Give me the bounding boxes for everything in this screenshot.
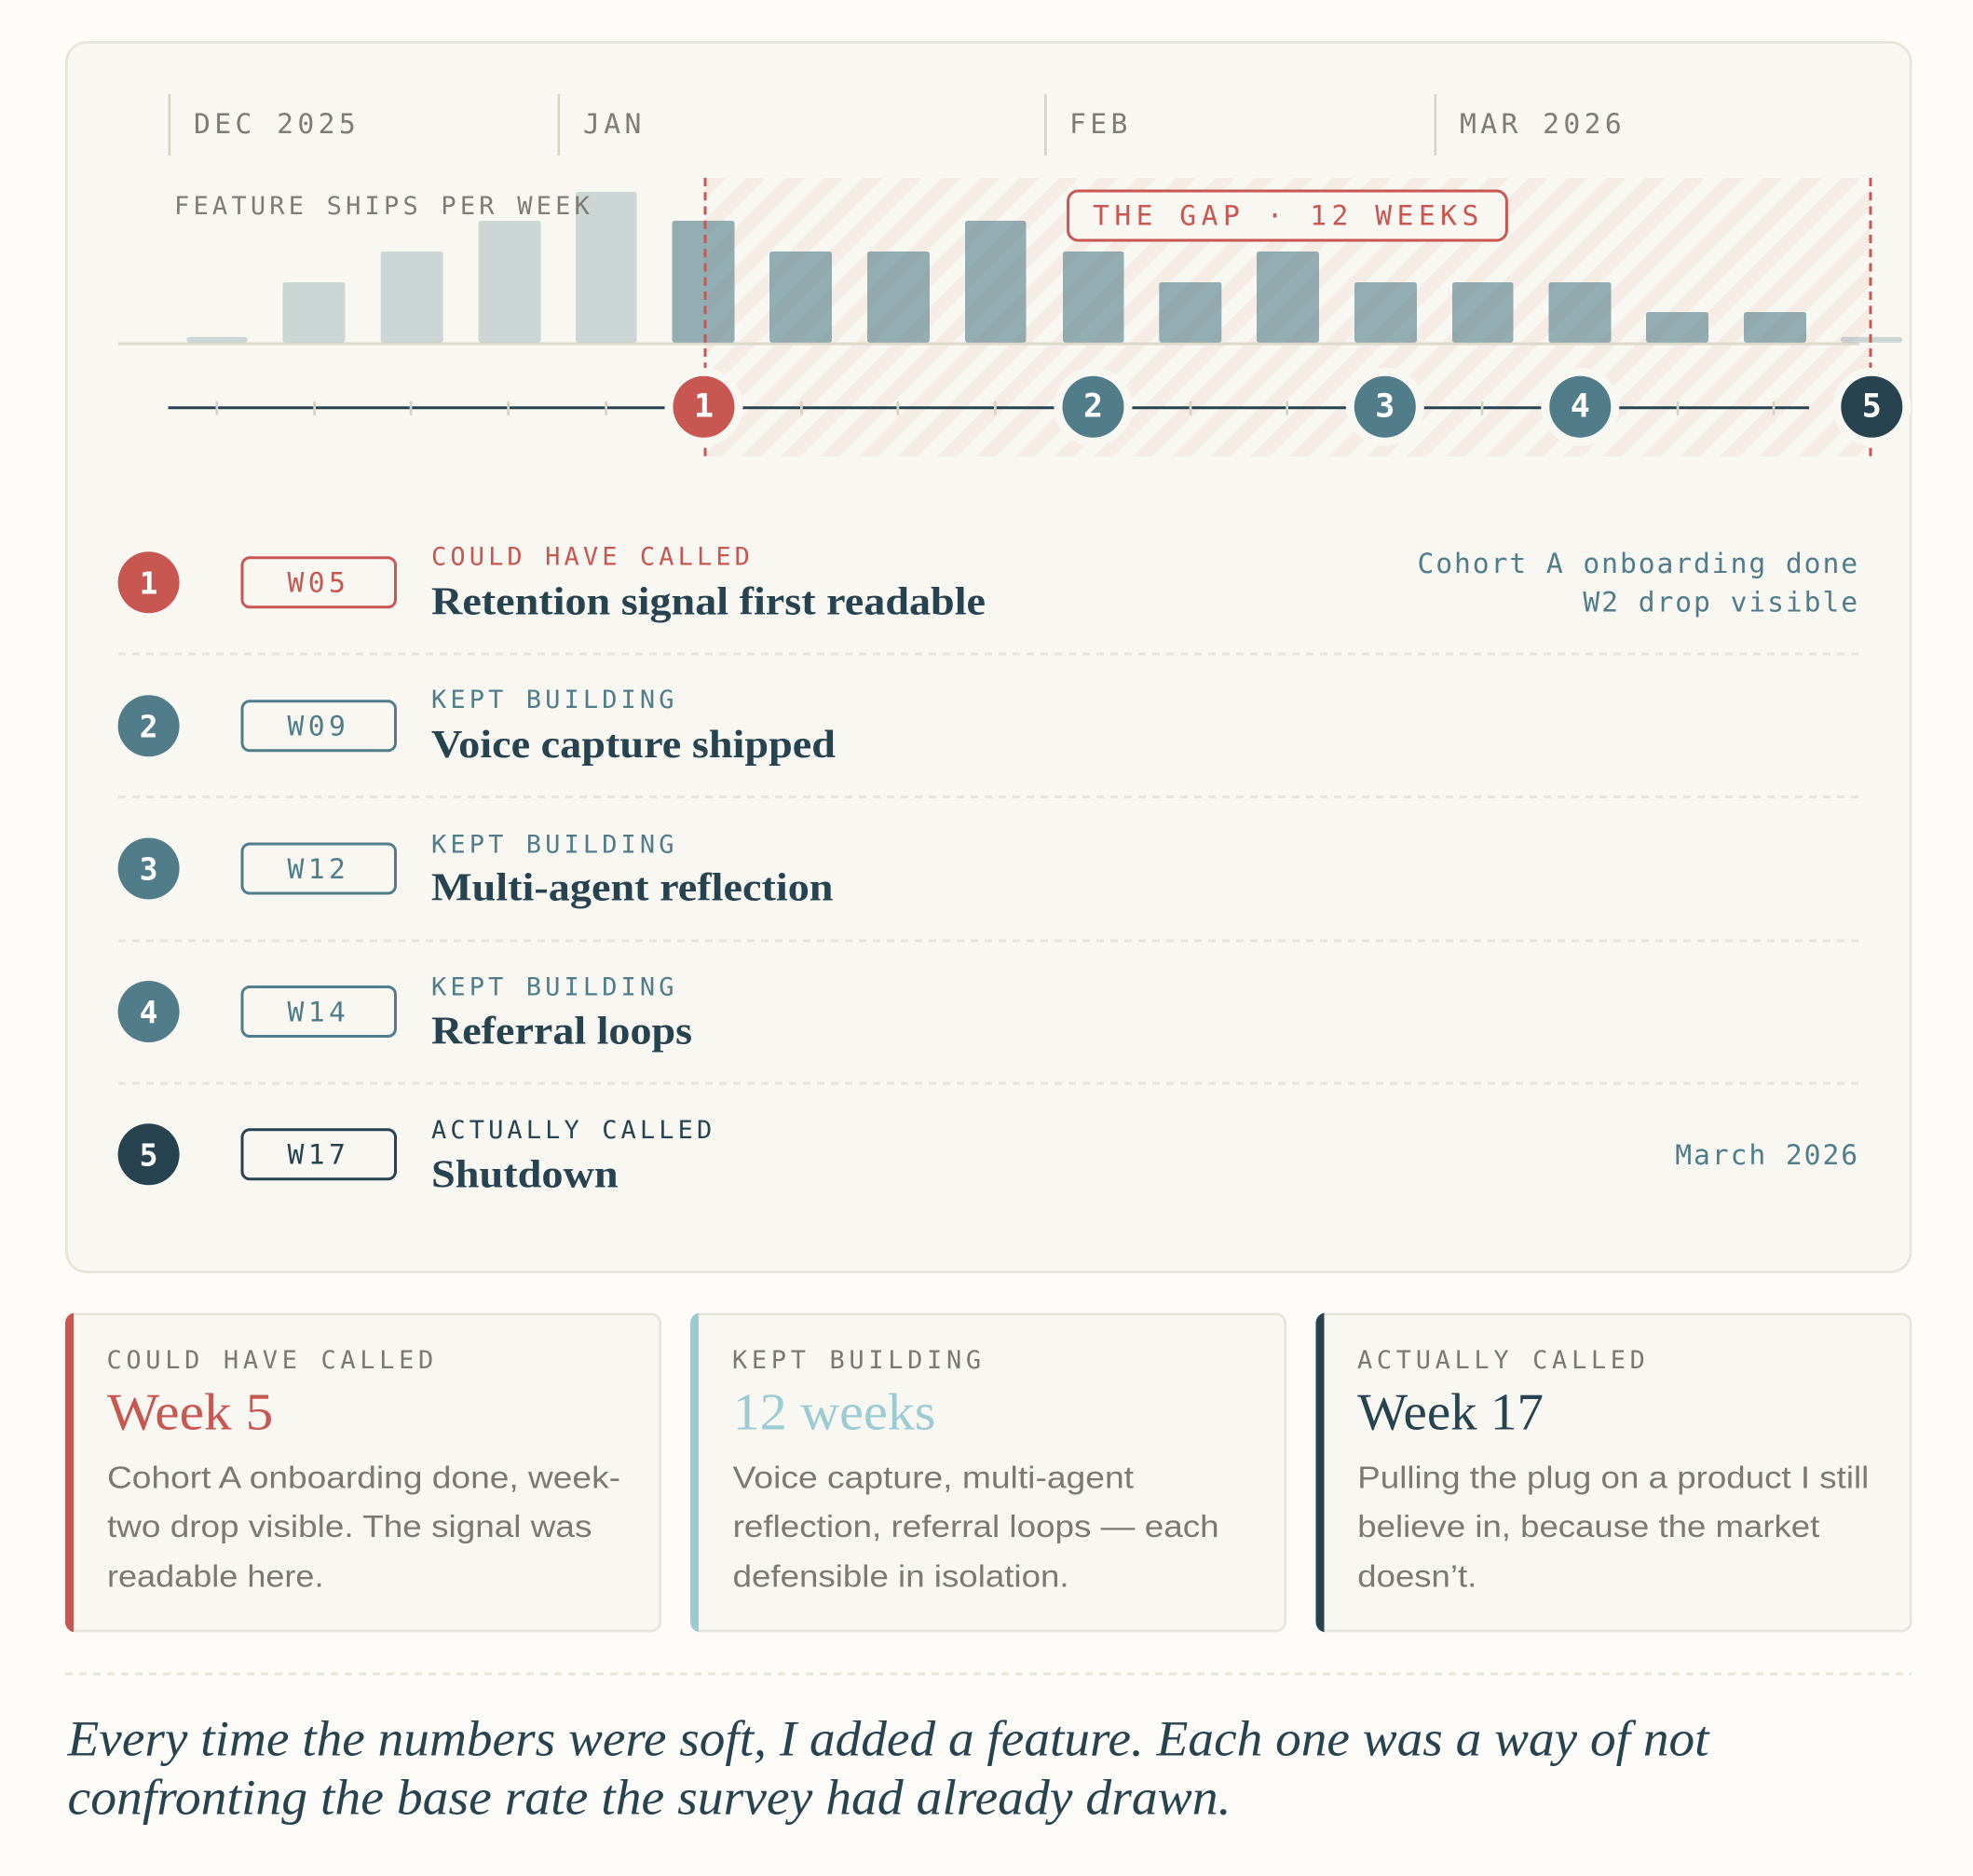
event row 5: W17 [287,1139,349,1172]
event row 2 [118,686,836,767]
timeline axis [168,401,1809,415]
card: actually called: ACTUALLY CALLED [1357,1346,1650,1375]
event row 5: ACTUALLY CALLED [431,1116,715,1145]
event row 4: Referral loops [431,1010,692,1053]
row 5 note: March 2026 [1675,1139,1859,1172]
card body: doesn’t. [1357,1559,1476,1594]
event row 5: Shutdown [431,1153,619,1196]
event row 1: 1 [140,564,158,601]
timeline marker 5: 5 [1862,387,1882,425]
card body: reflection, referral loops — each [733,1510,1219,1544]
card body: defensible in isolation. [733,1559,1069,1594]
panel: timeline [66,43,1911,1272]
event row 2: 2 [140,708,158,744]
gap end marker [1869,178,1872,456]
card body [733,1461,1219,1594]
event row 3: KEPT BUILDING [431,831,678,860]
card body: two drop visible. The signal was [107,1510,592,1544]
month: January: JAN [583,108,646,141]
event row 4: 4 [140,994,158,1030]
month: February: FEB [1069,108,1132,141]
event row 4: KEPT BUILDING [431,972,678,1001]
callout: the gap [1068,191,1506,240]
card: could have called [65,1312,660,1632]
event row 2: KEPT BUILDING [431,686,678,714]
card: kept building: KEPT BUILDING [732,1346,986,1375]
event row 2: Voice capture shipped [431,724,836,767]
timeline marker 2: 2 [1083,387,1103,425]
gap start marker [704,178,706,456]
timeline marker 5 [1832,368,1911,446]
timeline marker 2 [1055,368,1133,446]
card: kept building: 12 weeks [733,1383,935,1441]
timeline marker 3 [1346,368,1424,446]
event row 3: W12 [287,853,349,886]
timeline marker 3: 3 [1375,387,1395,425]
month header [168,94,1626,156]
event row 1: COULD HAVE CALLED [431,542,754,571]
closing quote: Every time the numbers were soft, I added a feature. Each one was a way of not [66,1710,1711,1766]
card body: believe in, because the market [1357,1510,1820,1544]
timeline marker 4: 4 [1571,387,1590,425]
chart label: FEATURE SHIPS PER WEEK [174,192,593,221]
event row 1: Retention signal first readable [431,580,986,623]
card body [107,1461,620,1594]
event row 1 [118,542,1859,623]
row 1 note: W2 drop visible [1583,587,1859,619]
card body: readable here. [107,1559,324,1594]
event row 1: W05 [287,567,349,600]
row 1 note [1417,548,1859,619]
callout: the gap: THE GAP · 12 WEEKS [1093,199,1484,232]
row 1 note: Cohort A onboarding done [1417,548,1859,580]
card: could have called: COULD HAVE CALLED [106,1346,438,1375]
event row 3: Multi-agent reflection [431,867,833,910]
gap region: hatched band [705,178,1871,456]
timeline marker 4 [1541,368,1619,446]
card: actually called: Week 17 [1357,1383,1544,1441]
event row 4 [118,972,692,1053]
event row 2: W09 [287,711,349,743]
month: January [557,94,646,156]
month: February [1044,94,1132,156]
event row 3: 3 [140,851,158,887]
event row 5: 5 [140,1136,158,1173]
event row 3 [118,831,834,910]
month: March 2026: MAR 2026 [1460,108,1626,141]
card: could have called: Week 5 [107,1383,273,1441]
bar chart: feature ships per week [118,192,1902,345]
timeline marker 1 [665,368,743,446]
card body [1357,1461,1869,1594]
event row 5 [118,1116,1859,1196]
card body: Pulling the plug on a product I still [1357,1461,1869,1495]
card body: Cohort A onboarding done, week- [107,1461,620,1495]
closing quote: confronting the base rate the survey had already drawn. [67,1770,1231,1826]
card body: Voice capture, multi-agent [733,1461,1135,1495]
card: kept building [690,1312,1286,1632]
event row 4: W14 [287,996,349,1028]
timeline marker 1: 1 [694,387,714,425]
card: actually called [1315,1312,1911,1632]
month: December 2025: DEC 2025 [194,108,360,141]
closing quote [66,1710,1711,1826]
